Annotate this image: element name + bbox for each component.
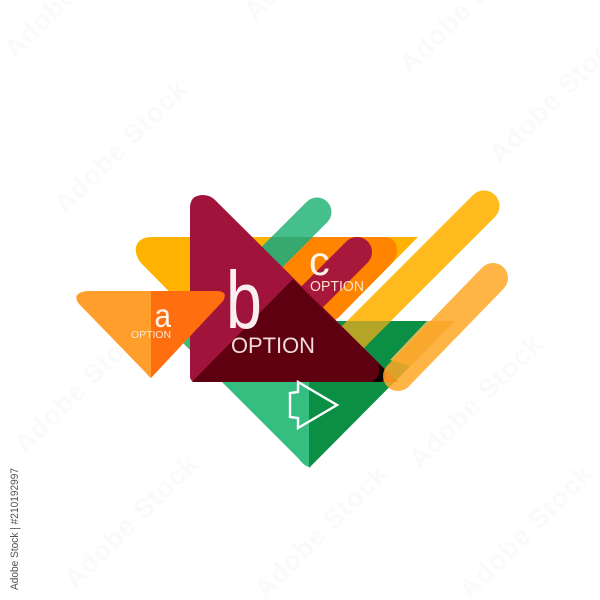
watermark pattern: Adobe Stock <box>403 329 549 474</box>
panel: option a orange triangle <box>76 291 225 378</box>
letter b: b <box>226 254 262 346</box>
orange rounded bar <box>398 278 493 376</box>
maroon rounded bar <box>295 252 357 314</box>
watermark pattern: Adobe Stock <box>453 459 599 600</box>
letter a: a <box>154 296 171 334</box>
green rounded bar <box>260 212 317 269</box>
watermark pattern: Adobe Stock <box>248 459 394 600</box>
label: option a: OPTION <box>131 329 171 341</box>
letter c: c <box>309 238 330 284</box>
icon: outlined arrow <box>290 382 337 428</box>
stock credit: Adobe Stock | #210192997 <box>9 468 21 590</box>
watermark pattern: Adobe Stock <box>48 74 194 219</box>
panel: green arrow triangle <box>178 321 455 468</box>
label: option c: OPTION <box>310 279 364 295</box>
watermark pattern: Adobe Stock <box>58 449 204 594</box>
infographic canvas <box>10 190 508 590</box>
back yellow triangle <box>136 237 418 340</box>
panel: option b maroon triangle <box>190 195 398 382</box>
panel: option c orange shape <box>250 237 397 340</box>
watermark pattern: Adobe Stock <box>8 314 154 459</box>
label: option b: OPTION <box>231 333 315 358</box>
yellow rounded bar <box>340 206 484 350</box>
